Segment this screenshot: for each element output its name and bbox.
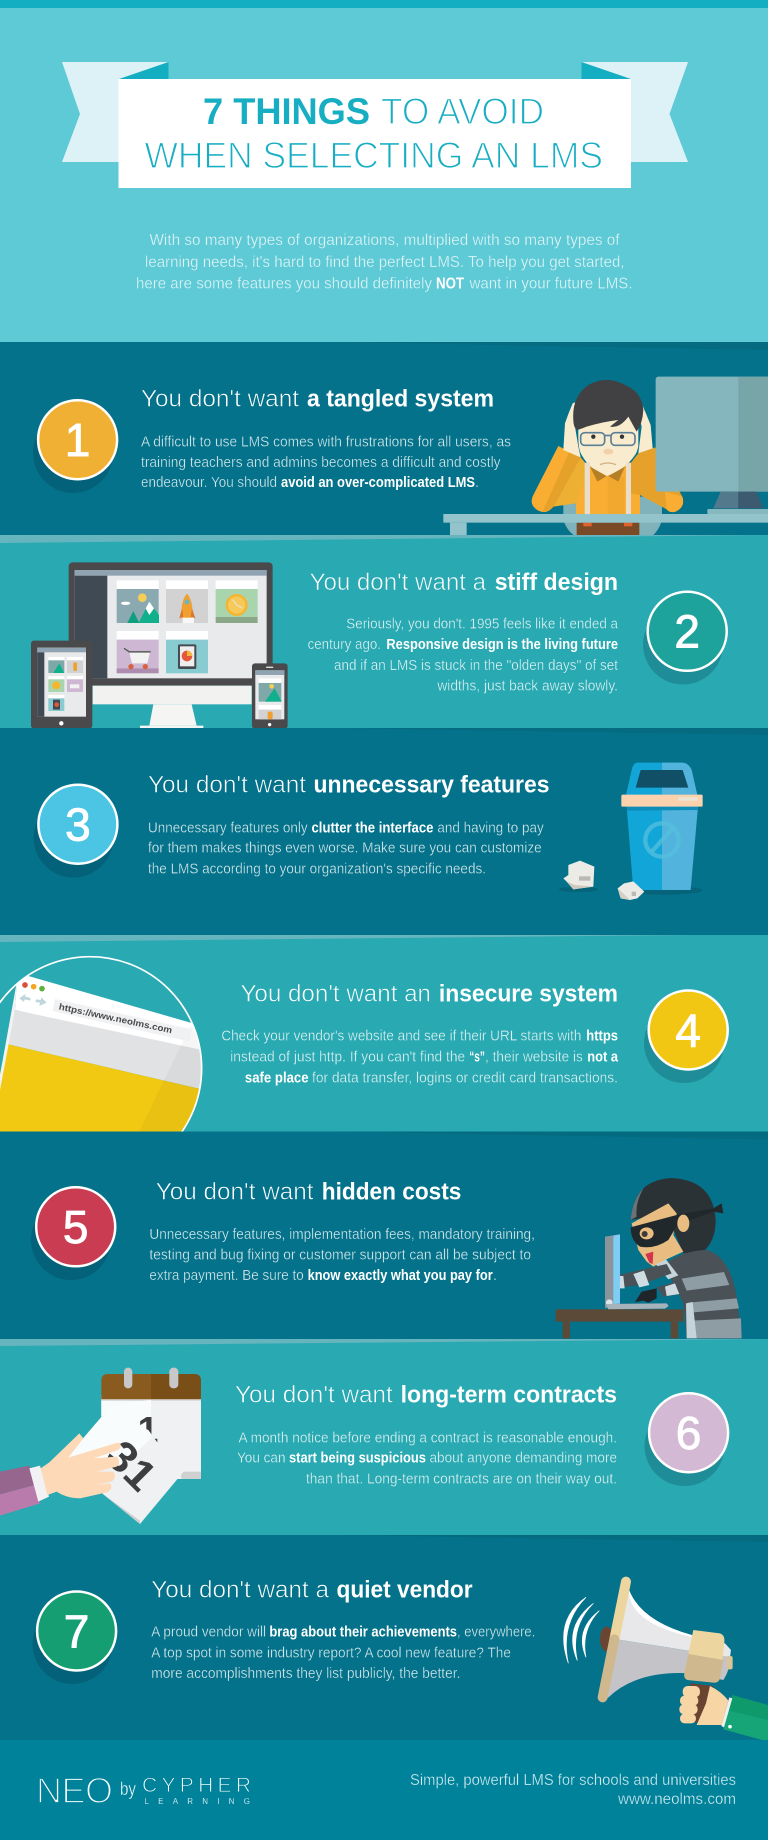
body text 4: https [586, 1029, 618, 1045]
intro text: learning needs, it's hard to find the perfect LMS. To help you get started, [145, 254, 624, 271]
body text 4: not a [587, 1050, 619, 1066]
intro text: want in your future LMS. [469, 276, 632, 292]
heading 3: unnecessary features [314, 772, 550, 799]
heading 7: You don't want a [151, 1576, 330, 1603]
browser address text: https://www.neolms.com [58, 1002, 173, 1035]
body text 3: and having to pay [437, 821, 544, 837]
body text 7: more accomplishments they list publicly, the better. [151, 1666, 460, 1682]
body text 5: know exactly what you pay for [308, 1268, 493, 1284]
heading 4: You don't want an [240, 981, 431, 1008]
heading 7: quiet vendor [336, 1576, 473, 1603]
number badge 3 [34, 785, 117, 878]
panel: section 4 insecure system [0, 935, 768, 1132]
number badge 1: 1 [65, 414, 90, 466]
body text 4: instead of just http. If you can't find the [230, 1050, 465, 1066]
logo: NEO by Cypher Learning: by [120, 1779, 136, 1799]
panel: header [0, 0, 768, 342]
heading 6: You don't want [235, 1382, 393, 1409]
title: 7 THINGS [203, 91, 370, 132]
body text 3: the LMS according to your organization's specific needs. [148, 861, 486, 877]
body text 6: than that. Long-term contracts are on their way out. [306, 1471, 617, 1487]
body text 4: for data transfer, logins or credit card transactions. [312, 1070, 618, 1086]
heading 7 [151, 1576, 473, 1603]
body text 3: for them makes things even worse. Make sure you can customize [148, 841, 542, 857]
heading 5 [156, 1178, 461, 1205]
intro text: NOT [436, 276, 464, 292]
illustration: stressed man at desk [443, 377, 768, 537]
body text 2: Seriously, you don't. 1995 feels like it ended a [346, 616, 619, 632]
calendar digit 31: 31 [96, 1431, 166, 1501]
body text 1: training teachers and admins becomes a difficult and costly [141, 455, 501, 471]
number badge 3: 3 [65, 798, 91, 850]
panel: section 1 tangled system [0, 342, 768, 537]
body text 2: and if an LMS is stuck in the "olden days" of set [334, 658, 618, 674]
body text 3: Unnecessary features only [148, 821, 308, 837]
body text 1 [141, 435, 511, 491]
footer tagline: www.neolms.com [617, 1791, 736, 1808]
body text 6 [237, 1431, 617, 1487]
body text 1: avoid an over-complicated LMS [281, 475, 475, 491]
number badge 1 [33, 400, 117, 493]
heading 4 [240, 981, 618, 1008]
body text 4: , their website is [485, 1050, 583, 1066]
heading 6 [235, 1382, 617, 1409]
body text 5: testing and bug fixing or customer support can all be subject to [149, 1247, 531, 1263]
body text 1: endeavour. You should [141, 475, 277, 491]
logo: NEO by Cypher Learning: CYPHER [142, 1774, 251, 1797]
body text 7 [151, 1625, 535, 1682]
number badge 6 [644, 1393, 728, 1486]
heading 1: You don't want [141, 386, 299, 413]
body text 3 [148, 821, 544, 877]
heading 6: long-term contracts [401, 1382, 617, 1409]
body text 7: , everywhere. [457, 1625, 535, 1641]
intro text [136, 232, 632, 292]
body text 5: . [493, 1268, 497, 1284]
body text 6: You can [237, 1451, 286, 1467]
body text 1: . [475, 475, 479, 491]
body text 4 [221, 1029, 619, 1086]
illustration: hacker at laptop [556, 1178, 742, 1338]
heading 5: hidden costs [322, 1178, 461, 1205]
heading 4: insecure system [439, 981, 618, 1008]
number badge 5 [31, 1187, 115, 1280]
heading 1: a tangled system [307, 386, 494, 413]
body text 2: century ago. [308, 637, 381, 653]
body text 5 [149, 1227, 535, 1284]
body text 4: Check your vendor's website and see if their URL starts with [221, 1029, 581, 1045]
title: WHEN SELECTING AN LMS [144, 135, 603, 176]
footer tagline: Simple, powerful LMS for schools and universities [410, 1772, 736, 1789]
logo: NEO by Cypher Learning: LEARNING [144, 1797, 250, 1806]
panel: section 2 stiff design [0, 535, 768, 729]
body text 7: A top spot in some industry report? A cool new feature? The [151, 1645, 511, 1661]
heading 2: You don't want a [310, 569, 487, 596]
body text 5: Unnecessary features, implementation fees, mandatory training, [149, 1227, 535, 1243]
panel: footer [0, 1740, 768, 1840]
panel: section 6 long-term contracts [0, 1339, 768, 1536]
heading 5: You don't want [156, 1178, 314, 1205]
number badge 6: 6 [676, 1407, 701, 1459]
body text 6: start being suspicious [289, 1451, 426, 1467]
illustration: hand tearing calendar page [0, 1368, 201, 1524]
body text 1: A difficult to use LMS comes with frustrations for all users, as [141, 435, 511, 451]
logo: NEO by Cypher Learning: NEO [36, 1770, 113, 1811]
heading 3 [148, 772, 550, 799]
body text 3: clutter the interface [312, 821, 434, 837]
body text 4: safe place [245, 1070, 309, 1086]
body text 6: about anyone demanding more [430, 1451, 617, 1467]
illustration: responsive devices [31, 562, 288, 729]
number badge 7 [32, 1592, 116, 1684]
calendar digit 1: 1 [138, 1408, 158, 1450]
number badge 7: 7 [64, 1606, 89, 1658]
body text 2 [308, 616, 619, 695]
illustration: megaphone in hand [564, 1582, 768, 1742]
ribbon banner [62, 62, 688, 188]
number badge 5: 5 [63, 1201, 88, 1253]
intro text: With so many types of organizations, multiplied with so many types of [150, 232, 620, 249]
number badge 4: 4 [675, 1004, 701, 1056]
illustration: trash bin with paper [559, 763, 703, 900]
footer tagline [410, 1772, 736, 1808]
title [144, 91, 603, 176]
panel: section 7 quiet vendor [0, 1535, 768, 1742]
heading 2: stiff design [495, 569, 618, 596]
title: TO AVOID [381, 91, 544, 132]
body text 4: “s” [469, 1050, 485, 1066]
number badge 4 [644, 990, 728, 1083]
body text 2: widths, just back away slowly. [436, 679, 618, 695]
intro text: here are some features you should definitely [136, 276, 432, 292]
heading 1 [141, 386, 494, 413]
logo: NEO by Cypher Learning [36, 1770, 251, 1811]
body text 7: brag about their achievements [269, 1625, 457, 1641]
panel: section 3 unnecessary features [0, 728, 768, 936]
heading 2 [310, 569, 618, 596]
body text 5: extra payment. Be sure to [149, 1268, 304, 1284]
panel: section 5 hidden costs [0, 1132, 768, 1340]
body text 7: A proud vendor will [151, 1625, 266, 1641]
body text 2: Responsive design is the living future [386, 637, 618, 653]
number badge 2 [643, 592, 727, 684]
number badge 2: 2 [674, 606, 700, 658]
body text 6: A month notice before ending a contract is reasonable enough. [238, 1431, 617, 1447]
illustration: browser in magnifying lens [0, 956, 202, 1132]
heading 3: You don't want [148, 772, 306, 799]
